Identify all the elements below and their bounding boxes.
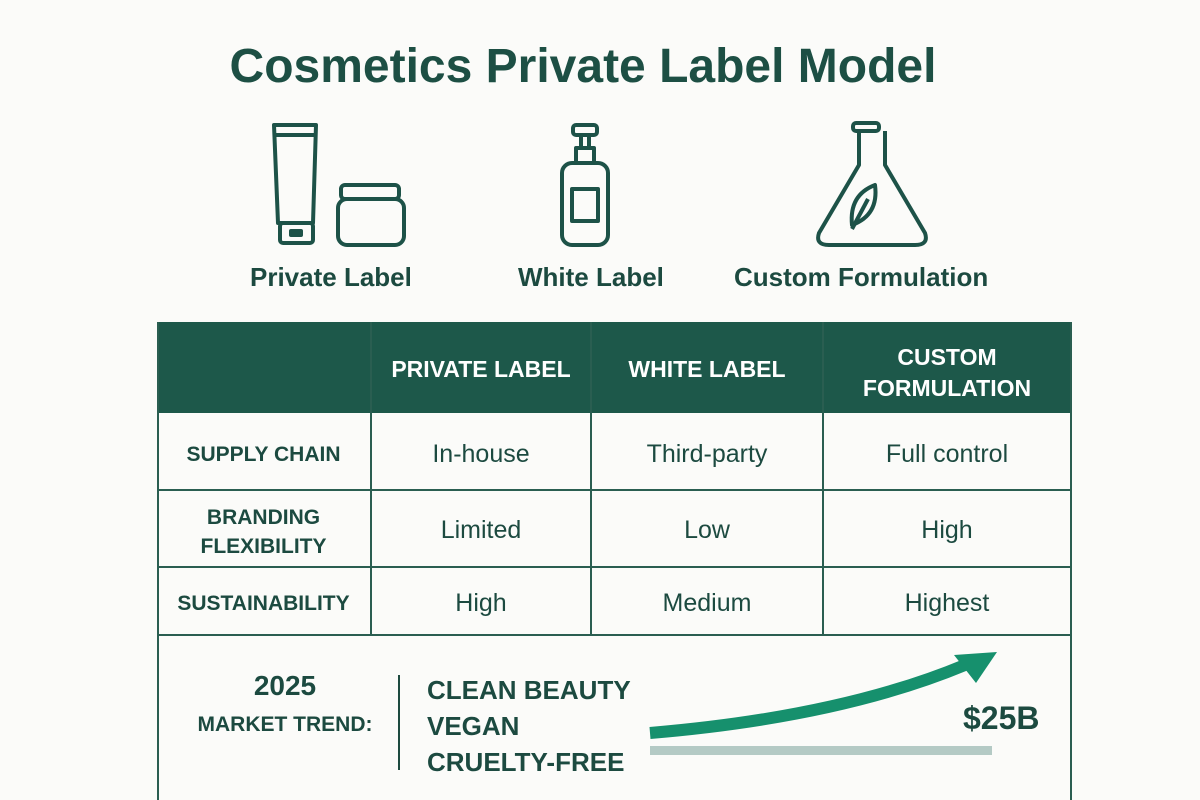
- icon labels: Private Label: [250, 262, 412, 292]
- value label: $25B: [963, 700, 1040, 736]
- icon: pump bottle: [560, 123, 610, 247]
- comparison table: Highest: [905, 589, 989, 617]
- icon: flask with leaf: [816, 121, 928, 247]
- comparison table: CUSTOM: [897, 344, 997, 370]
- comparison table: Full control: [886, 440, 1008, 468]
- trend list: [427, 675, 631, 777]
- trend list: CLEAN BEAUTY: [427, 675, 631, 705]
- market trend label: 2025: [254, 670, 316, 701]
- growth arrow chart: [650, 652, 997, 755]
- title: Cosmetics Private Label Model: [230, 40, 936, 93]
- table rows: SUPPLY CHAIN: [186, 443, 341, 466]
- market trend label: MARKET TREND:: [198, 713, 372, 736]
- trend list: CRUELTY-FREE: [427, 747, 624, 777]
- comparison table: SUSTAINABILITY: [177, 592, 350, 615]
- comparison table: High: [921, 516, 973, 544]
- comparison table: Medium: [663, 589, 751, 617]
- comparison table: WHITE LABEL: [628, 356, 786, 382]
- comparison table: FORMULATION: [863, 375, 1031, 401]
- comparison table: Third-party: [647, 440, 767, 468]
- comparison table: High: [455, 589, 507, 617]
- market trend label: [198, 670, 372, 736]
- comparison table: BRANDING: [207, 506, 320, 529]
- comparison table: Limited: [441, 516, 521, 544]
- comparison table: [157, 322, 1072, 800]
- comparison table: FLEXIBILITY: [200, 535, 326, 558]
- comparison table: Low: [684, 516, 730, 544]
- text: White Label: [518, 262, 664, 292]
- icon: tube and jar: [272, 123, 406, 247]
- text: Custom Formulation: [734, 262, 988, 292]
- comparison table: PRIVATE LABEL: [391, 356, 571, 382]
- trend list: VEGAN: [427, 711, 519, 741]
- table header: [157, 322, 1072, 413]
- comparison table: In-house: [432, 440, 530, 468]
